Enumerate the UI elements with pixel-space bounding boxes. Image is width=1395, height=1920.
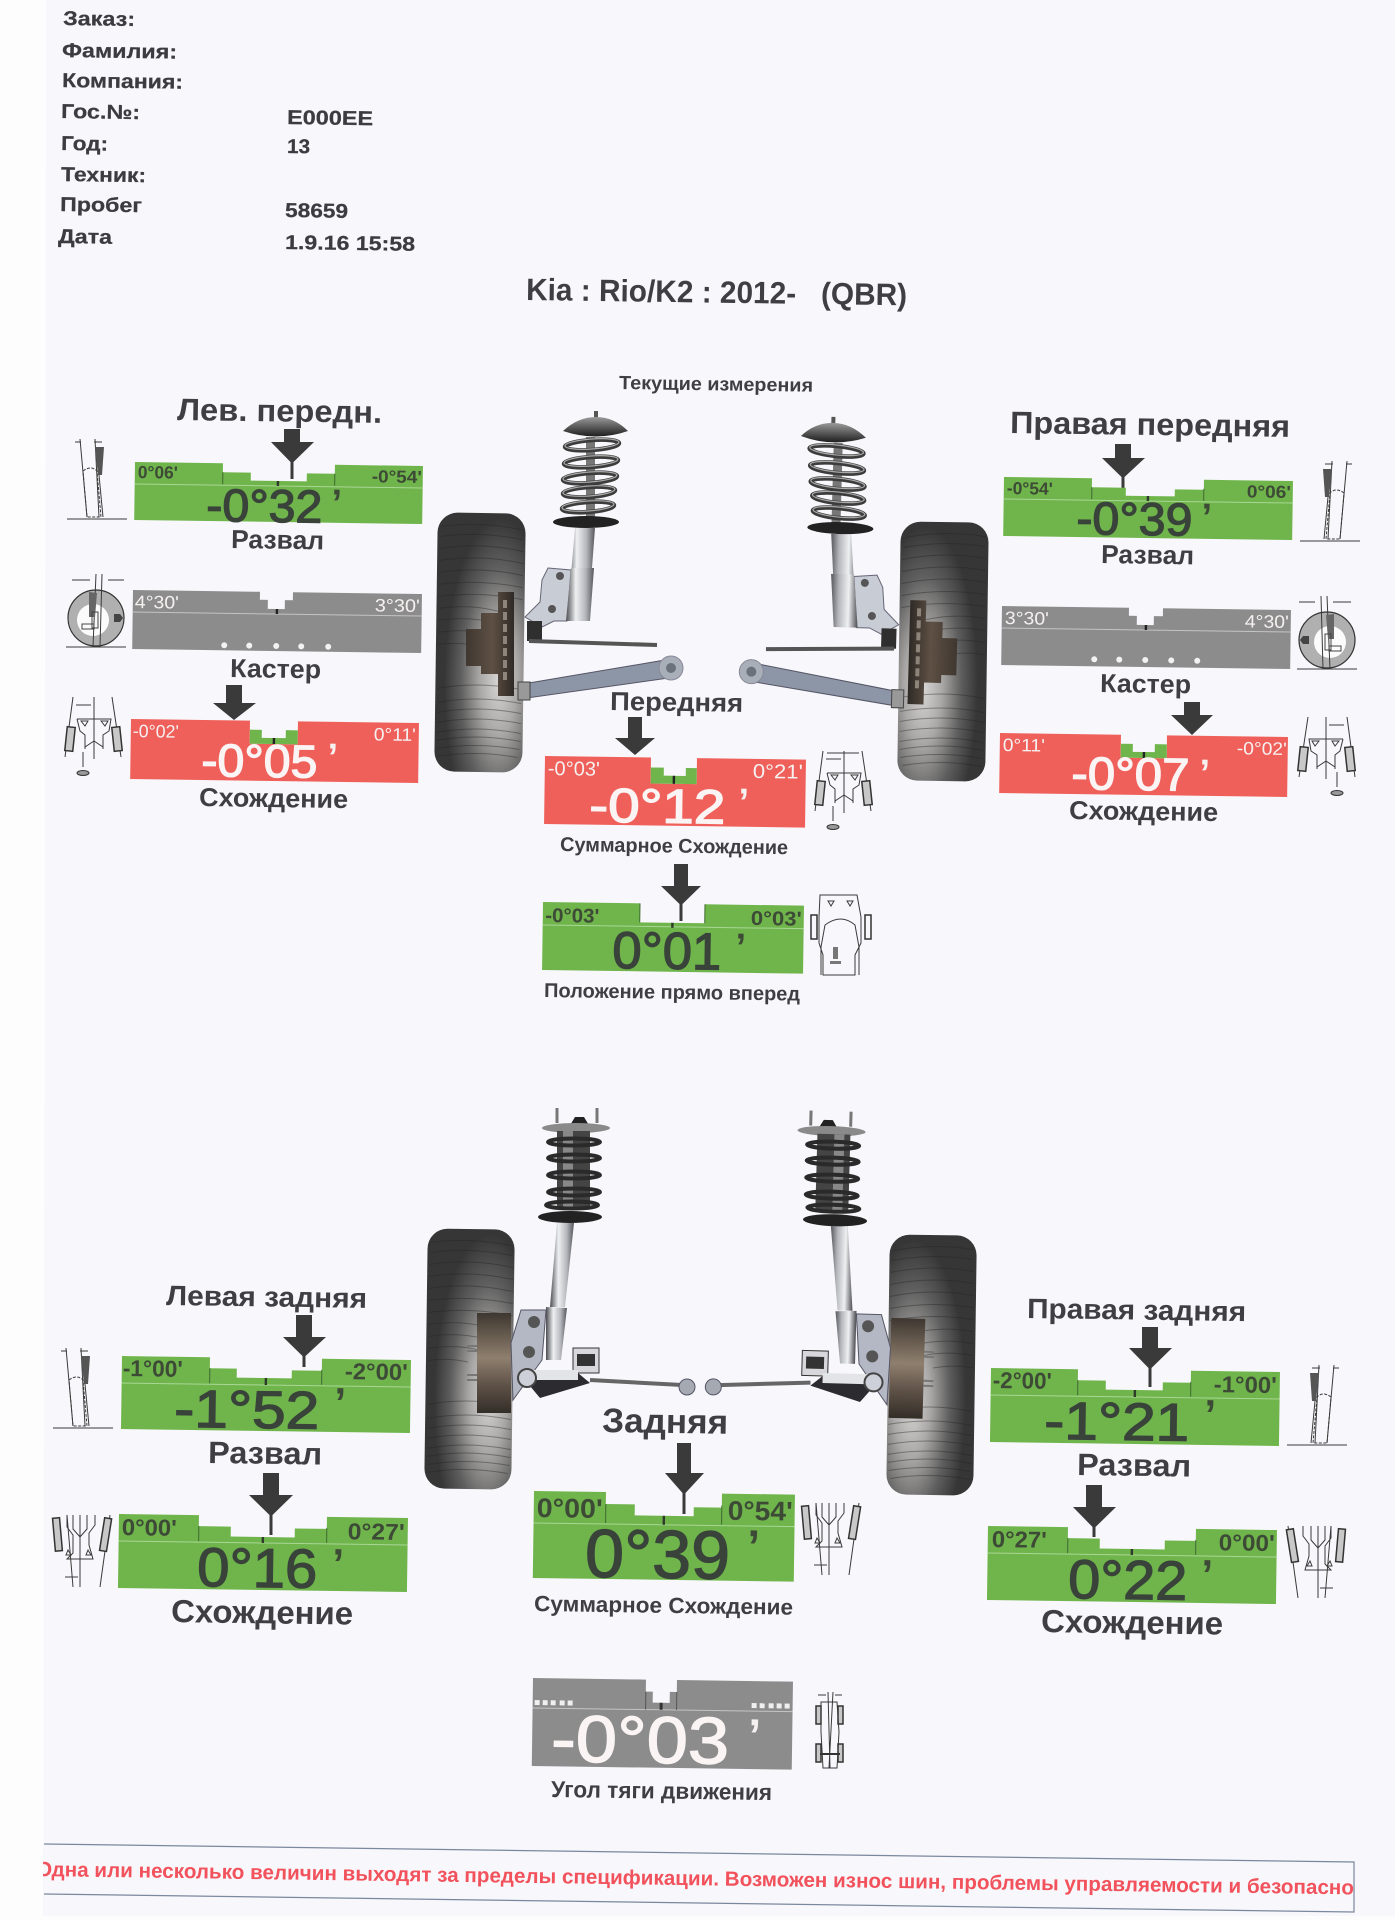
- label: camber: Развал: [1077, 1447, 1191, 1484]
- gauge: right rear toe: 0°22: [1068, 1548, 1188, 1612]
- label: toe: Схождение: [1069, 795, 1218, 827]
- gauge: left rear camber: -1°52: [174, 1380, 320, 1441]
- field label: technician: Техник:: [61, 164, 146, 187]
- gauge: thrust angle: [532, 1678, 793, 1779]
- gauge: front total toe: [544, 756, 806, 836]
- gauge: straight ahead: 0°01: [612, 922, 722, 981]
- gauge: left front toe: [130, 719, 419, 789]
- gauge: right front caster: 3°30': [1005, 608, 1049, 629]
- gauge: left front toe: 0°11': [374, 724, 416, 745]
- gauge: right rear camber: [990, 1367, 1280, 1454]
- arrow: camber marker: [271, 429, 314, 479]
- header: order details: [58, 8, 415, 256]
- value: date: 1.9.16 15:58: [285, 232, 415, 256]
- illustration: front suspension right: [736, 414, 995, 783]
- gauge: front total toe: 0°21': [753, 761, 803, 784]
- heading: right front: Правая передняя: [1010, 405, 1290, 444]
- warning text: Одна или несколько величин выходят за пределы спецификации. Возможен износ шин, проблемы управляемости и безопасно: [36, 1858, 1354, 1899]
- tire: [424, 1228, 515, 1490]
- warning banner: [36, 1844, 1354, 1912]
- gauge: straight ahead: -0°03': [545, 905, 599, 928]
- gauge: left rear camber: [121, 1355, 411, 1442]
- gauge: right rear camber: -1°21: [1044, 1392, 1190, 1453]
- panel: right front wheel: [999, 405, 1360, 827]
- arrow: straight ahead marker: [661, 864, 701, 921]
- arrow: total toe marker: [615, 717, 655, 755]
- icon: straight ahead: [811, 895, 871, 975]
- strut: [523, 1223, 574, 1360]
- strut: [527, 528, 595, 641]
- gauge: right rear toe: [987, 1526, 1277, 1613]
- tire: [434, 512, 526, 773]
- icon: toe: [1286, 1526, 1345, 1598]
- illustration: rear suspension right: [702, 1108, 984, 1497]
- label: thrust angle: Угол тяги движения: [551, 1776, 772, 1805]
- gauge: right front camber: 0°06': [1247, 481, 1291, 502]
- arrow: camber marker: [1102, 444, 1145, 493]
- gauge: left rear toe: ’: [332, 1540, 344, 1587]
- gauge: rear total toe: 0°00': [537, 1493, 603, 1524]
- icon: total toe: [802, 1503, 861, 1575]
- label: caster: Кастер: [1100, 668, 1191, 699]
- arrow: toe marker: [249, 1473, 293, 1535]
- gauge: right front toe: ’: [1199, 753, 1210, 795]
- field label: mileage: Пробег: [60, 194, 142, 217]
- gauge: left rear camber: -1°00': [123, 1355, 183, 1382]
- label: toe: Схождение: [1041, 1603, 1223, 1642]
- gauge: right front camber: ’: [1201, 497, 1212, 539]
- gauge: left front toe: ’: [327, 737, 338, 779]
- label: camber: Развал: [208, 1435, 322, 1472]
- trailing link: [518, 1348, 695, 1398]
- panel: left rear wheel: [53, 1280, 411, 1632]
- field label: company: Компания:: [62, 70, 183, 94]
- panel: right rear wheel: [987, 1293, 1347, 1642]
- gauge: straight ahead: 0°03': [751, 908, 802, 931]
- arrow: toe marker: [213, 685, 256, 720]
- heading: rear: Задняя: [602, 1402, 728, 1442]
- gauge: right front camber: [1003, 477, 1293, 547]
- icon: camber: [67, 439, 127, 519]
- brake drum: [467, 1313, 511, 1413]
- gauge: right rear camber: -2°00': [993, 1367, 1052, 1394]
- arrow: camber marker: [1129, 1327, 1172, 1387]
- icon: camber: [53, 1348, 113, 1428]
- icon: camber: [1300, 461, 1360, 541]
- field label: date: Дата: [58, 226, 113, 249]
- panel: rear axle totals: [532, 1402, 861, 1805]
- value: registration: E000EE: [287, 107, 373, 130]
- gauge: straight ahead: [542, 902, 804, 983]
- gauge: left rear toe: 0°27': [348, 1518, 405, 1545]
- heading: front: Передняя: [610, 686, 743, 718]
- field label: registration: Гос.№:: [61, 101, 140, 124]
- gauge: right front camber: -0°54': [1007, 478, 1053, 499]
- icon: thrust angle: [816, 1692, 843, 1768]
- illustration: front suspension left: [434, 411, 683, 773]
- lower arm: [518, 656, 683, 700]
- gauge: right front toe: 0°11': [1003, 735, 1045, 756]
- icon: toe: [53, 1515, 112, 1587]
- gauge: rear total toe: [533, 1491, 795, 1595]
- value: year: 13: [287, 136, 310, 158]
- gauge: thrust angle: -0°03: [551, 1701, 730, 1778]
- gauge: right front caster: 4°30': [1245, 611, 1289, 632]
- gauge: left rear toe: [118, 1514, 408, 1601]
- gauge: rear total toe: ’: [747, 1520, 760, 1572]
- strut bracket: [525, 568, 571, 627]
- gauge: front total toe: -0°03': [548, 758, 600, 781]
- gauge: right rear toe: 0°27': [992, 1526, 1047, 1553]
- gauge: left rear toe: 0°16: [197, 1536, 318, 1600]
- gauge: left front toe: -0°05: [201, 734, 318, 788]
- gauge: right front caster: [1001, 606, 1291, 669]
- gauge: rear total toe: 0°39: [585, 1516, 731, 1594]
- gauge: left front camber: ’: [331, 483, 342, 525]
- value: mileage: 58659: [285, 200, 348, 223]
- field label: surname: Фамилия:: [62, 40, 177, 64]
- gauge: right rear toe: ’: [1201, 1551, 1213, 1598]
- gauge: straight ahead: ’: [735, 927, 746, 969]
- icon: camber: [1287, 1365, 1347, 1445]
- arrow: toe marker: [1171, 702, 1213, 735]
- gauge: right front toe: -0°07: [1071, 747, 1190, 801]
- gauge: left front camber: [134, 462, 423, 534]
- heading: right rear: Правая задняя: [1027, 1293, 1246, 1327]
- heading: left front: Лев. передн.: [177, 392, 382, 430]
- gauge: right front camber: -0°39: [1076, 492, 1193, 546]
- field label: order: Заказ:: [63, 8, 135, 31]
- gauge: right rear toe: 0°00': [1219, 1529, 1275, 1556]
- arrow: camber marker: [283, 1315, 326, 1367]
- icon: caster: [66, 574, 126, 647]
- gauge: left front caster: 4°30': [135, 592, 179, 613]
- icon: caster: [1297, 596, 1357, 669]
- gauge: right rear camber: ’: [1204, 1391, 1216, 1438]
- label: total toe: Суммарное Схождение: [560, 834, 788, 859]
- gauge: left front toe: -0°02': [133, 721, 179, 742]
- arrow: toe marker: [1073, 1485, 1116, 1537]
- gauge: left front caster: [132, 590, 422, 653]
- panel: front axle totals: [542, 686, 872, 1006]
- label: toe: Схождение: [171, 1593, 353, 1632]
- gauge: left rear camber: ’: [334, 1379, 346, 1426]
- gauge: left rear camber: -2°00': [345, 1358, 408, 1385]
- label: camber: Развал: [1101, 539, 1194, 570]
- title: vehicle: Kia : Rio/K2 : 2012- (QBR): [526, 272, 907, 312]
- strut bracket: [511, 1310, 546, 1400]
- label: straight ahead: Положение прямо вперед: [544, 980, 801, 1006]
- coil spring: [553, 411, 628, 528]
- gauge: rear total toe: 0°54': [728, 1496, 793, 1527]
- illustration: rear suspension left: [424, 1108, 695, 1490]
- gauge: left rear toe: 0°00': [122, 1514, 177, 1541]
- gauge: front total toe: -0°12: [589, 780, 726, 835]
- gauge: right front toe: -0°02': [1237, 738, 1287, 759]
- gauge: left front camber: -0°32: [206, 479, 323, 533]
- panel: left front wheel: [65, 392, 423, 814]
- label: camber: Развал: [231, 524, 324, 555]
- gauge: right front toe: [999, 733, 1288, 802]
- gauge: left front camber: 0°06': [138, 462, 178, 483]
- icon: toe: [1298, 717, 1355, 796]
- heading: current measurements: Текущие измерения: [619, 373, 813, 397]
- label: caster: Кастер: [230, 653, 321, 684]
- heading: left rear: Левая задняя: [166, 1280, 367, 1314]
- field label: year: Год:: [61, 133, 108, 156]
- hub and disc: [466, 592, 514, 696]
- gauge: left front caster: 3°30': [375, 595, 420, 616]
- gauge: left front camber: -0°54': [372, 466, 422, 487]
- coil spring: [538, 1108, 610, 1223]
- gauge: front total toe: ’: [738, 782, 749, 824]
- label: toe: Схождение: [199, 782, 348, 814]
- arrow: total toe marker: [665, 1443, 704, 1514]
- icon: toe: [65, 697, 122, 776]
- gauge: right rear camber: -1°00': [1214, 1371, 1277, 1398]
- tie rod: [529, 641, 657, 645]
- label: total toe: Суммарное Схождение: [534, 1591, 793, 1620]
- icon: total toe: [815, 751, 872, 830]
- gauge: thrust angle: ’: [748, 1709, 761, 1761]
